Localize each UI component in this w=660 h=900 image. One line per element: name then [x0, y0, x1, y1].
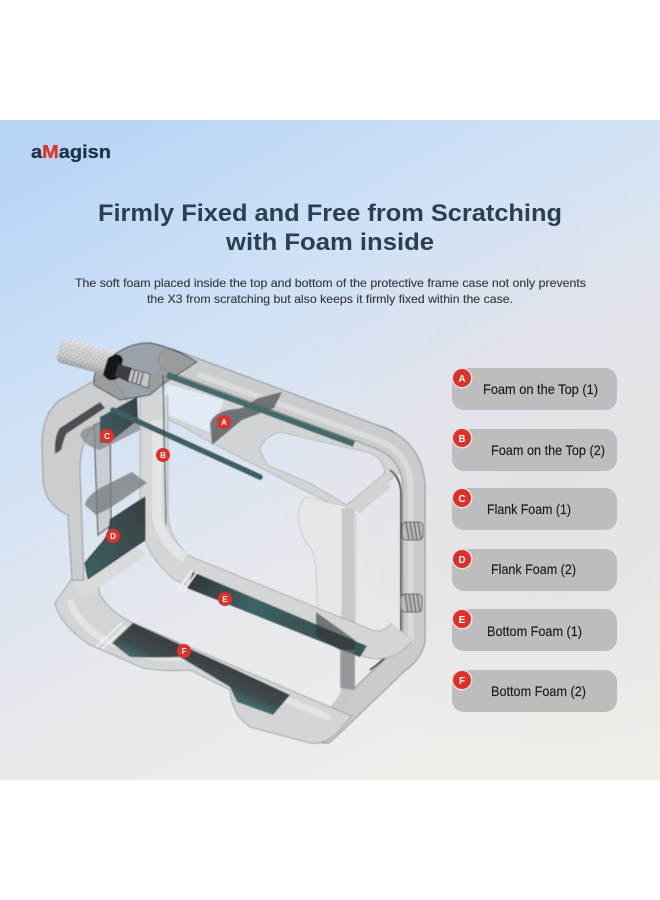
foam A — [210, 392, 282, 445]
badge C on frame: C — [104, 432, 110, 441]
bottom and left lower frame — [55, 577, 352, 743]
badge B on frame: B — [160, 451, 166, 460]
legend item B: B — [458, 434, 466, 445]
legend item D: D — [458, 555, 466, 566]
foam D — [85, 497, 145, 579]
top rod — [167, 375, 354, 444]
pillar C — [94, 418, 111, 535]
shaft — [115, 364, 132, 382]
lower strut shade — [340, 650, 355, 690]
legend item E: Bottom Foam (1) — [487, 623, 582, 639]
badge F on frame — [177, 644, 191, 658]
pillar B right dark line — [163, 375, 166, 525]
description text: the X3 from scratching but also keeps it firmly fixed within the case. — [147, 292, 513, 306]
overlay dark band — [316, 612, 355, 650]
strut to corner — [356, 483, 388, 510]
top face of frame — [150, 358, 408, 512]
legend item A: Foam on the Top (1) — [483, 381, 598, 397]
foam C — [100, 397, 138, 443]
gradient panel — [0, 120, 660, 780]
inner dark edge of right rail — [370, 470, 401, 670]
grip vertical strut — [332, 508, 348, 714]
illustration: transparent protective frame case — [42, 337, 423, 743]
dark top knob — [94, 343, 197, 400]
pillar and E rail — [154, 395, 402, 645]
title — [98, 200, 562, 256]
left frame dark recess — [55, 402, 105, 454]
side screws — [401, 522, 423, 612]
badge F on frame: F — [182, 647, 187, 656]
D brace rail — [78, 549, 140, 592]
badge A on frame — [217, 415, 231, 429]
description text: The soft foam placed inside the top and bottom of the protective frame case not only prevents — [75, 276, 586, 290]
clip left of E — [178, 570, 197, 592]
legend item E — [452, 608, 617, 651]
legend item F — [452, 670, 617, 712]
legend item C — [452, 488, 617, 530]
legend item A — [452, 368, 617, 410]
small top window — [158, 384, 224, 433]
black collar — [103, 354, 123, 380]
badge A on frame: A — [221, 418, 227, 427]
legend item D — [452, 548, 617, 591]
description text — [75, 276, 586, 306]
grey tab above D — [85, 472, 147, 515]
thumb screw — [56, 337, 150, 388]
legend item C: C — [458, 494, 466, 505]
badge D on frame: D — [110, 532, 116, 541]
legend item A: A — [458, 374, 466, 385]
grip blob — [298, 497, 356, 640]
grey top tab C — [80, 402, 140, 450]
knurled head — [56, 337, 114, 376]
badge E on frame — [218, 592, 232, 606]
badge D on frame — [106, 529, 120, 543]
legend item F: F — [459, 676, 465, 687]
title: with Foam inside — [225, 229, 434, 256]
left outer frame — [42, 372, 130, 580]
foam F — [112, 623, 290, 715]
legend item D: Flank Foam (2) — [491, 561, 576, 577]
badge E on frame: E — [222, 595, 228, 604]
lower frame highlight — [70, 600, 330, 718]
thread — [128, 369, 150, 388]
legend item F: Bottom Foam (2) — [491, 683, 586, 699]
foam B rod — [113, 410, 260, 477]
legend item B — [452, 428, 617, 471]
legend item E: E — [459, 615, 466, 626]
badge C on frame — [100, 429, 114, 443]
clip left of F — [96, 623, 126, 649]
right rail — [170, 360, 414, 732]
logo: aMagisn: aMagisn — [31, 142, 111, 162]
title: Firmly Fixed and Free from Scratching — [98, 200, 562, 227]
foam E — [187, 572, 367, 657]
legend item C: Flank Foam (1) — [487, 501, 571, 517]
legend item B: Foam on the Top (2) — [491, 442, 605, 458]
badge B on frame — [156, 448, 170, 462]
